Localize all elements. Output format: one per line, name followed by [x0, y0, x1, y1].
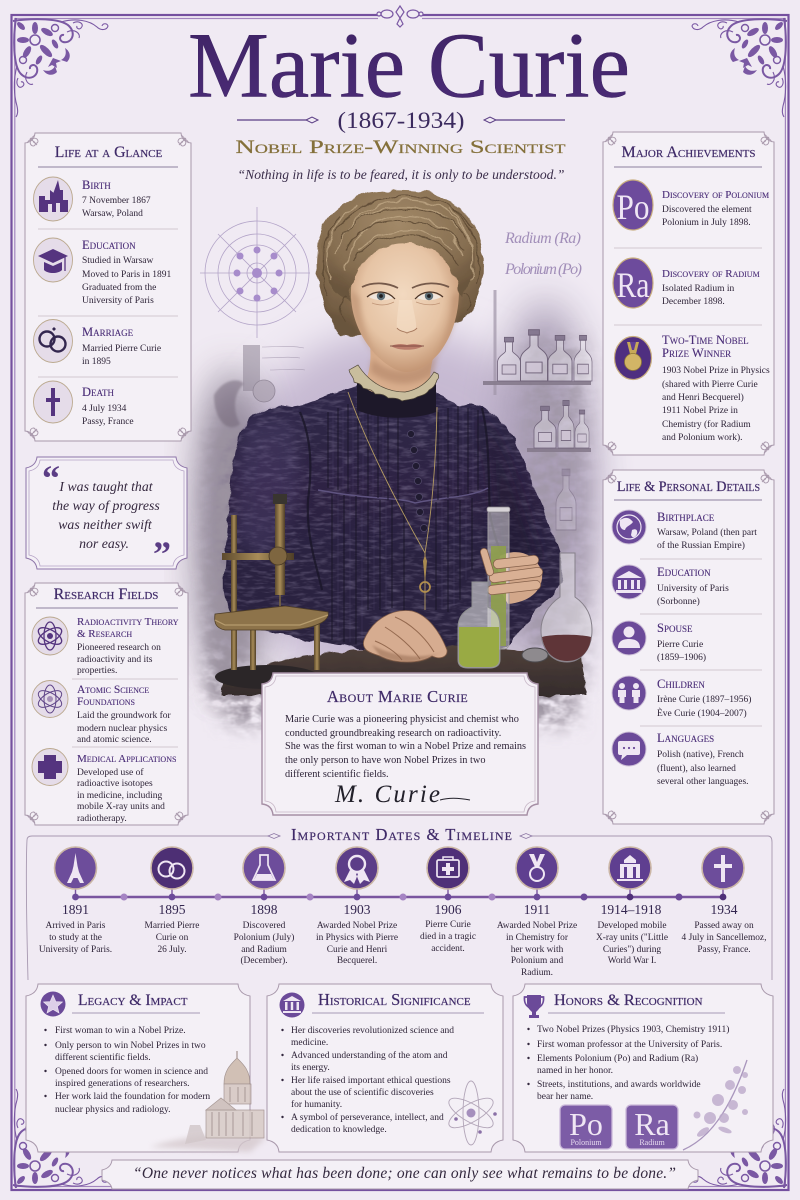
event: 1903 [316, 847, 398, 966]
timeline axis [75, 894, 723, 900]
event: 1906: died in a tragic [420, 932, 476, 942]
event: 1898: Discovered [243, 921, 286, 931]
item: education: Studied in Warsaw [82, 256, 153, 266]
panel: major achievements [603, 132, 774, 455]
body text: the only person to have won Nobel Prizes in two [285, 755, 485, 766]
detail: spouse: (1859–1906) [657, 652, 706, 663]
field: atomic science: Laid the groundwork for [77, 710, 171, 721]
body text: She was the first woman to win a Nobel Prize and remains [285, 741, 526, 752]
atom diagram sketch [200, 207, 310, 338]
quote text: the way of progress [52, 498, 160, 513]
field: radioactivity: radioactivity and its [77, 655, 153, 665]
item: marriage: in 1895 [82, 357, 111, 367]
event: 1898: 1898 [250, 902, 278, 917]
bullet list: medicine. [291, 1038, 328, 1048]
event: 1895: 1895 [158, 902, 186, 917]
panel: historical significance [267, 984, 503, 1152]
bullet list: Elements Polonium (Po) and Radium (Ra) [537, 1053, 698, 1064]
event: 1934: 4 July in Sancellemoz, [682, 933, 766, 943]
panel: quote: ” [153, 534, 171, 574]
atom illustration [445, 1081, 497, 1145]
heading: Life at a Glance [55, 144, 163, 161]
event: 1906: accident. [431, 944, 465, 954]
portrait illustration [198, 190, 595, 725]
lifespan dates [237, 108, 565, 134]
body text: different scientific fields. [285, 769, 389, 780]
handwritten element names [504, 230, 582, 278]
item: marriage: Married Pierre Curie [82, 344, 161, 354]
item: birth: Birth [82, 178, 111, 192]
event: 1934 [682, 847, 766, 955]
bullet list: First woman to win a Nobel Prize. [55, 1026, 186, 1036]
field: medical applications: radiotherapy. [77, 814, 127, 824]
event: 1914-1918: X-ray units ("Little [596, 932, 668, 943]
floral sprig [683, 1060, 748, 1150]
panel: quote [26, 457, 187, 574]
achievement: two-time nobel: and Polonium work). [662, 432, 742, 443]
bullet list [527, 1024, 729, 1102]
handwritten element names: Polonium (Po) [504, 261, 582, 278]
heading: Legacy & Impact [78, 992, 188, 1009]
item: death: Death [82, 385, 115, 399]
bullet list: its energy. [291, 1063, 330, 1073]
quote text: I was taught that [58, 479, 154, 494]
achievement: polonium: Discovery of Polonium [662, 189, 769, 201]
achievement: radium: Discovery of Radium [662, 268, 760, 280]
heading: Honors & Recognition [554, 990, 703, 1009]
event: 1895 [145, 847, 199, 955]
bullet list: Advanced understanding of the atom and [291, 1050, 448, 1061]
heading: Major Achievements [621, 144, 756, 161]
small dish [522, 648, 548, 662]
field: atomic science: Foundations [77, 696, 135, 708]
hair back [316, 190, 483, 336]
event: 1891 [39, 847, 112, 955]
item: death [34, 381, 134, 427]
bullet list: A symbol of perseverance, intellect, and [291, 1112, 444, 1123]
bullet list: for humanity. [291, 1099, 342, 1110]
detail: languages: several other languages. [657, 777, 749, 787]
achievement: polonium: Polonium in July 1898. [662, 218, 751, 228]
field: medical applications: mobile X-ray units and [77, 802, 165, 812]
round flask [541, 553, 592, 662]
event: 1914-1918: Curies") during [603, 944, 661, 955]
event: 1891: to study at the [49, 933, 102, 943]
bullet list: Only person to win Nobel Prizes in two [55, 1041, 206, 1051]
element tile: radium: Ra [634, 1106, 670, 1142]
event: 1914-1918: 1914–1918 [601, 902, 662, 917]
item: education [34, 238, 171, 306]
element tile: polonium [560, 1105, 612, 1149]
achievement: radium [613, 258, 760, 308]
element tile: polonium: Polonium [570, 1138, 602, 1147]
detail: birthplace: of the Russian Empire) [657, 540, 745, 551]
bullet list: First woman professor at the University of Paris. [537, 1039, 722, 1050]
table [222, 646, 586, 695]
event: 1911: her work with [511, 945, 564, 955]
achievement: two-time nobel: Chemistry (for Radium [662, 419, 751, 430]
bullet list [281, 1026, 454, 1135]
bullet list [44, 1026, 210, 1115]
item: education: Education [82, 238, 136, 252]
panel: honors and recognition [513, 984, 773, 1152]
panel: life at a glance [25, 133, 191, 441]
detail: spouse: Pierre Curie [657, 640, 703, 650]
bullet list: bear her name. [537, 1092, 593, 1102]
event: 1914-1918 [596, 847, 668, 966]
collar and ruffle [349, 365, 439, 418]
event: 1934: Passy, France. [697, 945, 751, 955]
green flask [458, 582, 500, 668]
achievement: two-time nobel: (shared with Pierre Curie [662, 379, 758, 390]
heading: About Marie Curie [327, 687, 468, 706]
detail: education: University of Paris [657, 583, 729, 594]
event: 1898: Polonium (July) [234, 932, 294, 943]
signature: M. Curie [334, 781, 440, 808]
event: 1895: 26 July. [157, 945, 187, 955]
bullet list: Her discoveries revolutionized science and [291, 1026, 454, 1036]
detail: children: Children [657, 677, 705, 691]
icon: temple badge [280, 992, 304, 1018]
event: 1934: 1934 [710, 902, 738, 917]
eyes [362, 283, 449, 305]
field: medical applications: Developed use of [77, 767, 144, 778]
bullet list: dedication to knowledge. [291, 1125, 387, 1135]
event: 1891: Arrived in Paris [46, 921, 106, 931]
bullet list: Her work laid the foundation for modern [55, 1091, 210, 1102]
element tile: radium: Radium [639, 1138, 665, 1147]
detail: children [612, 676, 751, 719]
field: radioactivity: properties. [77, 666, 117, 676]
achievement: radium: Isolated Radium in [662, 284, 735, 294]
item: death: Passy, France [82, 417, 134, 427]
achievement: two-time nobel [614, 333, 770, 443]
detail: education [612, 565, 729, 607]
detail: languages: Languages [657, 731, 714, 745]
event: 1895: Married Pierre [145, 921, 199, 931]
quote text [52, 479, 160, 551]
heading: Historical Significance [318, 990, 471, 1009]
quote marks: “ [42, 458, 60, 498]
item: birth: Warsaw, Poland [82, 209, 143, 219]
handwritten element names: Radium (Ra) [504, 230, 581, 247]
panel: bottom quotation [102, 1160, 698, 1189]
field: atomic science: and atomic science. [77, 735, 152, 745]
event: 1903: Curie and Henri [327, 945, 388, 955]
event: 1906 [420, 847, 476, 954]
event: 1914-1918: World War I. [608, 956, 656, 966]
event: 1911: 1911 [524, 902, 550, 917]
title: Marie Curie [188, 14, 630, 118]
event: 1911 [497, 847, 577, 978]
field: atomic science: Atomic Science [77, 684, 149, 696]
bullet list: Streets, institutions, and awards worldwide [537, 1080, 701, 1090]
event: 1898: (December). [240, 955, 288, 966]
palm of holding hand [498, 552, 542, 604]
achievement: polonium: Discovered the element [662, 205, 752, 215]
heading: Important Dates & Timeline [291, 825, 512, 844]
field: radioactivity: & Research [77, 628, 132, 640]
clasped hand [363, 611, 447, 662]
subtitle: Nobel Prize-Winning Scientist [236, 137, 566, 158]
field: medical applications: in medicine, including [77, 791, 162, 801]
detail: birthplace: Warsaw, Poland (then part [657, 527, 757, 538]
item: birth [34, 177, 151, 221]
field: medical applications: Medical Applications [77, 753, 176, 765]
test tube [487, 507, 510, 649]
item: death: 4 July 1934 [82, 404, 127, 414]
element tile: polonium: Po [569, 1106, 603, 1142]
icon: trophy [524, 995, 544, 1018]
event: 1895: Curie on [156, 933, 189, 943]
laboratory background [198, 300, 595, 725]
item: education: Graduated from the [82, 282, 156, 293]
achievement: two-time nobel: Two-Time Nobel [662, 333, 749, 347]
lifespan dates: (1867-1934) [338, 108, 464, 134]
event: 1911: Awarded Nobel Prize [497, 921, 577, 931]
event: 1903: Becquerel. [337, 956, 377, 966]
field: medical applications: radioactive isotopes [77, 779, 153, 789]
sketched apparatus [214, 345, 305, 427]
bullet list: nuclear physics and radiology. [55, 1105, 170, 1115]
detail: birthplace [612, 510, 757, 551]
event: 1911: Polonium and [511, 956, 563, 966]
field: radioactivity [32, 616, 179, 676]
bullet list: named in her honor. [537, 1066, 613, 1076]
shelves with bottles [483, 290, 592, 530]
top quotation: “Nothing in life is to be feared, it is only to be understood.” [238, 167, 564, 182]
event: 1911: Radium. [521, 968, 553, 978]
detail: languages: (fluent), also learned [657, 763, 736, 774]
field: atomic science [32, 680, 171, 745]
field: medical applications [32, 748, 176, 824]
event: 1914-1918: Developed mobile [598, 921, 666, 931]
detail: languages [612, 731, 749, 787]
hair front [321, 191, 478, 322]
panel: research fields [25, 583, 188, 825]
panel: legacy and impact [26, 984, 266, 1152]
field: atomic science: modern nuclear physics [77, 724, 168, 734]
detail: children: Irène Curie (1897–1956) [657, 694, 751, 705]
body text [285, 714, 526, 780]
achievement: polonium [613, 180, 769, 230]
detail: spouse [612, 621, 706, 663]
item: education: Moved to Paris in 1891 [82, 270, 171, 280]
achievement: two-time nobel: Prize Winner [662, 346, 731, 360]
achievement: two-time nobel: and Henri Becquerel) [662, 392, 744, 403]
bullet list: different scientific fields. [55, 1052, 151, 1063]
bullet list: inspired generations of researchers. [55, 1078, 190, 1089]
item: marriage [34, 320, 161, 367]
bullet list: Opened doors for women in science and [55, 1066, 208, 1077]
event: 1903: 1903 [344, 902, 371, 917]
quote text: nor easy. [79, 536, 129, 551]
body text: conducted groundbreaking research on radioactivity. [285, 728, 501, 739]
field: radioactivity: Pioneered research on [77, 643, 161, 653]
detail: children: Ève Curie (1904–2007) [657, 707, 747, 719]
achievement: polonium: Po [616, 187, 650, 227]
detail: education: Education [657, 565, 711, 579]
item: birth: 7 November 1867 [82, 196, 151, 206]
achievement: radium: December 1898. [662, 297, 725, 307]
event: 1891: 1891 [62, 902, 89, 917]
detail: spouse: Spouse [657, 621, 693, 635]
field: radioactivity: Radioactivity Theory [77, 616, 179, 628]
nose and mouth [390, 300, 424, 350]
bullet list: Her life raised important ethical questions [291, 1075, 451, 1086]
event: 1903: Awarded Nobel Prize [317, 921, 397, 931]
detail: languages: Polish (native), French [657, 749, 744, 760]
panel: timeline [26, 825, 772, 980]
heading: Research Fields [54, 586, 158, 603]
event: 1906: 1906 [434, 902, 462, 917]
fingers of holding hand [484, 552, 538, 590]
neck [358, 342, 438, 394]
icon: star badge [40, 992, 66, 1016]
panel: about marie curie [262, 673, 538, 815]
heading: Life & Personal Details [617, 479, 760, 495]
bullet list: about the use of scientific discoveries [291, 1087, 434, 1098]
detail: birthplace: Birthplace [657, 510, 715, 524]
brass microscope apparatus [215, 494, 328, 689]
event: 1898 [234, 847, 294, 966]
bullet list: Two Nobel Prizes (Physics 1903, Chemistry 1911) [537, 1024, 729, 1035]
item: marriage: Marriage [82, 325, 134, 339]
quote text: was neither swift [58, 517, 153, 532]
event: 1906: Pierre Curie [425, 920, 471, 930]
detail: education: (Sorbonne) [657, 596, 700, 607]
panel: bottom quotation: “One never notices what has been done; one can only see what remains to be done.” [133, 1165, 676, 1182]
face [351, 238, 459, 372]
necklace and pendant [348, 392, 437, 610]
element tile: radium [626, 1105, 678, 1149]
achievement: two-time nobel: 1911 Nobel Prize in [662, 406, 738, 416]
building illustration [150, 1051, 266, 1152]
event: 1898: and Radium [241, 945, 287, 955]
event: 1911: in Chemistry for [506, 932, 569, 943]
event: 1903: in Physics with Pierre [316, 933, 398, 943]
event: 1934: Passed away on [694, 921, 754, 931]
achievement: radium: Ra [616, 265, 650, 305]
dress [220, 385, 570, 655]
body text: Marie Curie was a pioneering physicist and chemist who [285, 714, 519, 725]
panel: life and personal details [603, 470, 774, 824]
event: 1891: University of Paris. [39, 944, 112, 955]
item: education: University of Paris [82, 295, 154, 306]
achievement: two-time nobel: 1903 Nobel Prize in Physics [662, 366, 770, 376]
